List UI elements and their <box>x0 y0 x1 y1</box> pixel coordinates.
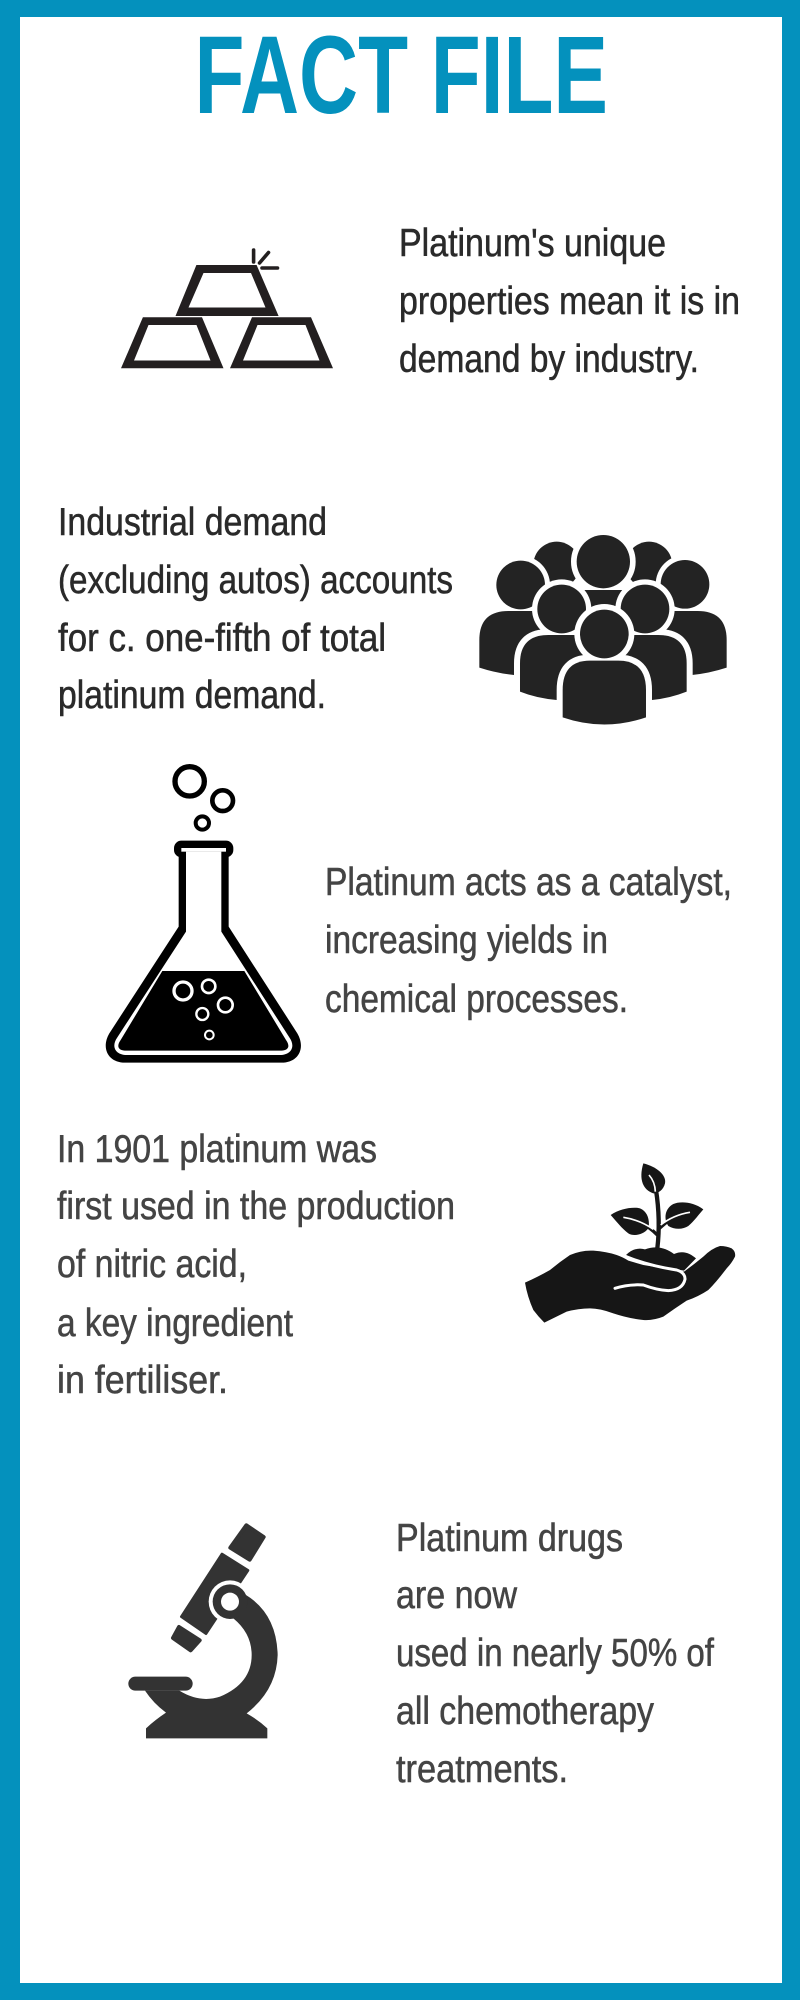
text: industrial demand: platinum demand. <box>58 674 326 717</box>
text: chemotherapy <box>396 1517 714 1791</box>
text: chemotherapy: Platinum drugs <box>396 1517 623 1560</box>
text: chemotherapy: all chemotherapy <box>396 1690 655 1733</box>
text: chemotherapy: treatments. <box>396 1748 568 1791</box>
text: unique properties <box>399 222 740 381</box>
text: nitric acid: a key ingredient <box>57 1302 293 1345</box>
title: FACT FILE <box>194 14 608 137</box>
text: industrial demand: (excluding autos) accounts <box>58 559 453 602</box>
icon: chemistry flask <box>106 767 301 1063</box>
icon: group of people <box>479 535 727 724</box>
text: catalyst: chemical processes. <box>325 978 628 1021</box>
text: nitric acid <box>57 1128 455 1402</box>
text: nitric acid: In 1901 platinum was <box>57 1128 377 1171</box>
text: industrial demand: for c. one-fifth of total <box>58 617 386 660</box>
text: industrial demand: Industrial demand <box>58 501 327 544</box>
text: unique properties: properties mean it is in <box>399 280 740 323</box>
text: unique properties: Platinum's unique <box>399 222 666 265</box>
text: unique properties: demand by industry. <box>399 338 699 381</box>
icon: gold bars <box>121 250 333 368</box>
text: catalyst: Platinum acts as a catalyst, <box>325 861 732 904</box>
text: nitric acid: in fertiliser. <box>57 1359 228 1402</box>
text: catalyst: increasing yields in <box>325 919 608 962</box>
text: chemotherapy: are now <box>396 1574 517 1617</box>
text: catalyst <box>325 861 732 1021</box>
text: nitric acid: of nitric acid, <box>57 1243 247 1286</box>
icon: hand holding seedling <box>525 1163 735 1323</box>
text: industrial demand <box>58 501 453 717</box>
icon: microscope <box>128 1525 278 1738</box>
text: chemotherapy: used in nearly 50% of <box>396 1632 714 1675</box>
text: nitric acid: first used in the production <box>57 1185 455 1228</box>
